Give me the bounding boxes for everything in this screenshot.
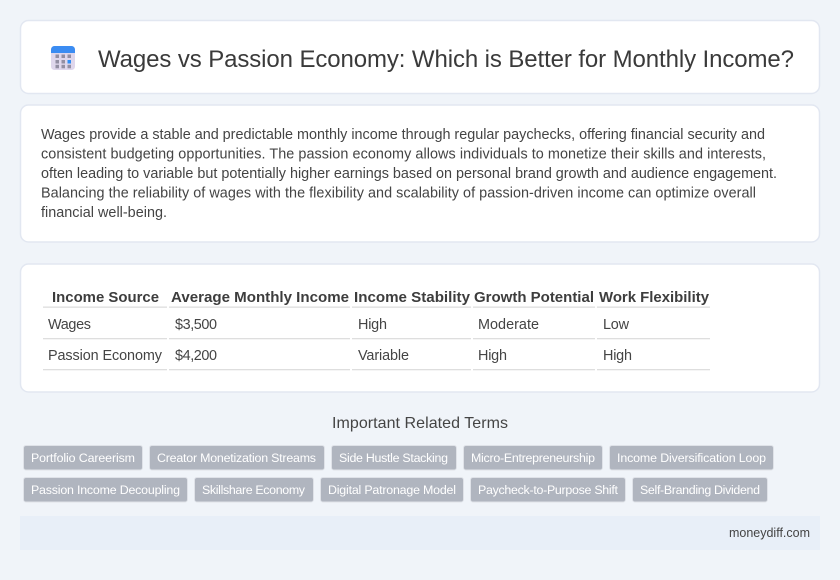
table row: passion economy: High [478, 348, 507, 364]
footer bar [20, 516, 820, 550]
text block: summary paragraph: consistent budgeting opportunities. The passion economy allows individuals to monetize their skills and interests, [41, 146, 766, 162]
panel: header [20, 20, 820, 94]
tag: self-branding dividend [632, 478, 768, 502]
tag: self-branding dividend: Self-Branding Dividend [640, 483, 760, 497]
table row: passion economy: $4,200 [175, 348, 217, 364]
table row: passion economy: Variable [358, 348, 409, 364]
tag: income diversification loop [610, 446, 774, 470]
tag: passion income decoupling [24, 478, 188, 502]
tag: portfolio careerism [24, 446, 142, 470]
tag group: related terms [24, 446, 774, 502]
table header: Growth Potential [474, 290, 594, 306]
tag: creator monetization streams: Creator Monetization Streams [157, 451, 316, 465]
tag: side hustle stacking: Side Hustle Stacking [339, 451, 448, 465]
panel: summary [20, 105, 820, 242]
tag: portfolio careerism: Portfolio Careerism [31, 451, 135, 465]
tag: micro-entrepreneurship: Micro-Entrepreneurship [471, 451, 595, 465]
text block: summary paragraph [41, 127, 777, 221]
text block: summary paragraph: financial well-being. [41, 205, 167, 221]
table header: Work Flexibility [599, 290, 709, 306]
icon: calendar [51, 46, 75, 70]
tag: creator monetization streams [150, 446, 324, 470]
footer source label: moneydiff.com [729, 526, 810, 540]
tag: digital patronage model: Digital Patronage Model [328, 483, 456, 497]
table row: passion economy [43, 348, 710, 370]
tag: micro-entrepreneurship [464, 446, 602, 470]
table header: Income Source [52, 290, 159, 306]
title: Wages vs Passion Economy: Which is Better for Monthly Income? [98, 46, 794, 73]
panel: comparison table [20, 264, 820, 392]
table row: wages: Moderate [478, 317, 539, 333]
tag: paycheck-to-purpose shift [470, 478, 626, 502]
table row: passion economy: Passion Economy [48, 348, 163, 364]
text block: summary paragraph: Wages provide a stable and predictable monthly income through regular paychecks, offering financial security and [41, 127, 765, 143]
text block: summary paragraph: Balancing the reliability of wages with the flexibility and scalability of passion-driven income can optimize overall [41, 186, 756, 202]
table header [43, 290, 710, 308]
table header: Income Stability [354, 290, 470, 306]
table row: wages: High [358, 317, 387, 333]
tag: digital patronage model [320, 478, 464, 502]
tag: paycheck-to-purpose shift: Paycheck-to-Purpose Shift [478, 483, 619, 497]
tag: side hustle stacking [332, 446, 456, 470]
table row: passion economy: High [603, 348, 632, 364]
heading: important related terms: Important Related Terms [332, 415, 508, 432]
tag: passion income decoupling: Passion Income Decoupling [31, 483, 180, 497]
tag: income diversification loop: Income Diversification Loop [617, 451, 766, 465]
table row: wages: $3,500 [175, 317, 217, 333]
table row: wages: Low [603, 317, 630, 333]
table header: Average Monthly Income [171, 290, 349, 306]
tag: skillshare economy: Skillshare Economy [202, 483, 306, 497]
table row: wages: Wages [48, 317, 91, 333]
tag: skillshare economy [194, 478, 314, 502]
text block: summary paragraph: often leading to variable but potentially higher earnings based on personal brand growth and audience engagement. [41, 166, 777, 182]
table row: wages [43, 317, 710, 339]
